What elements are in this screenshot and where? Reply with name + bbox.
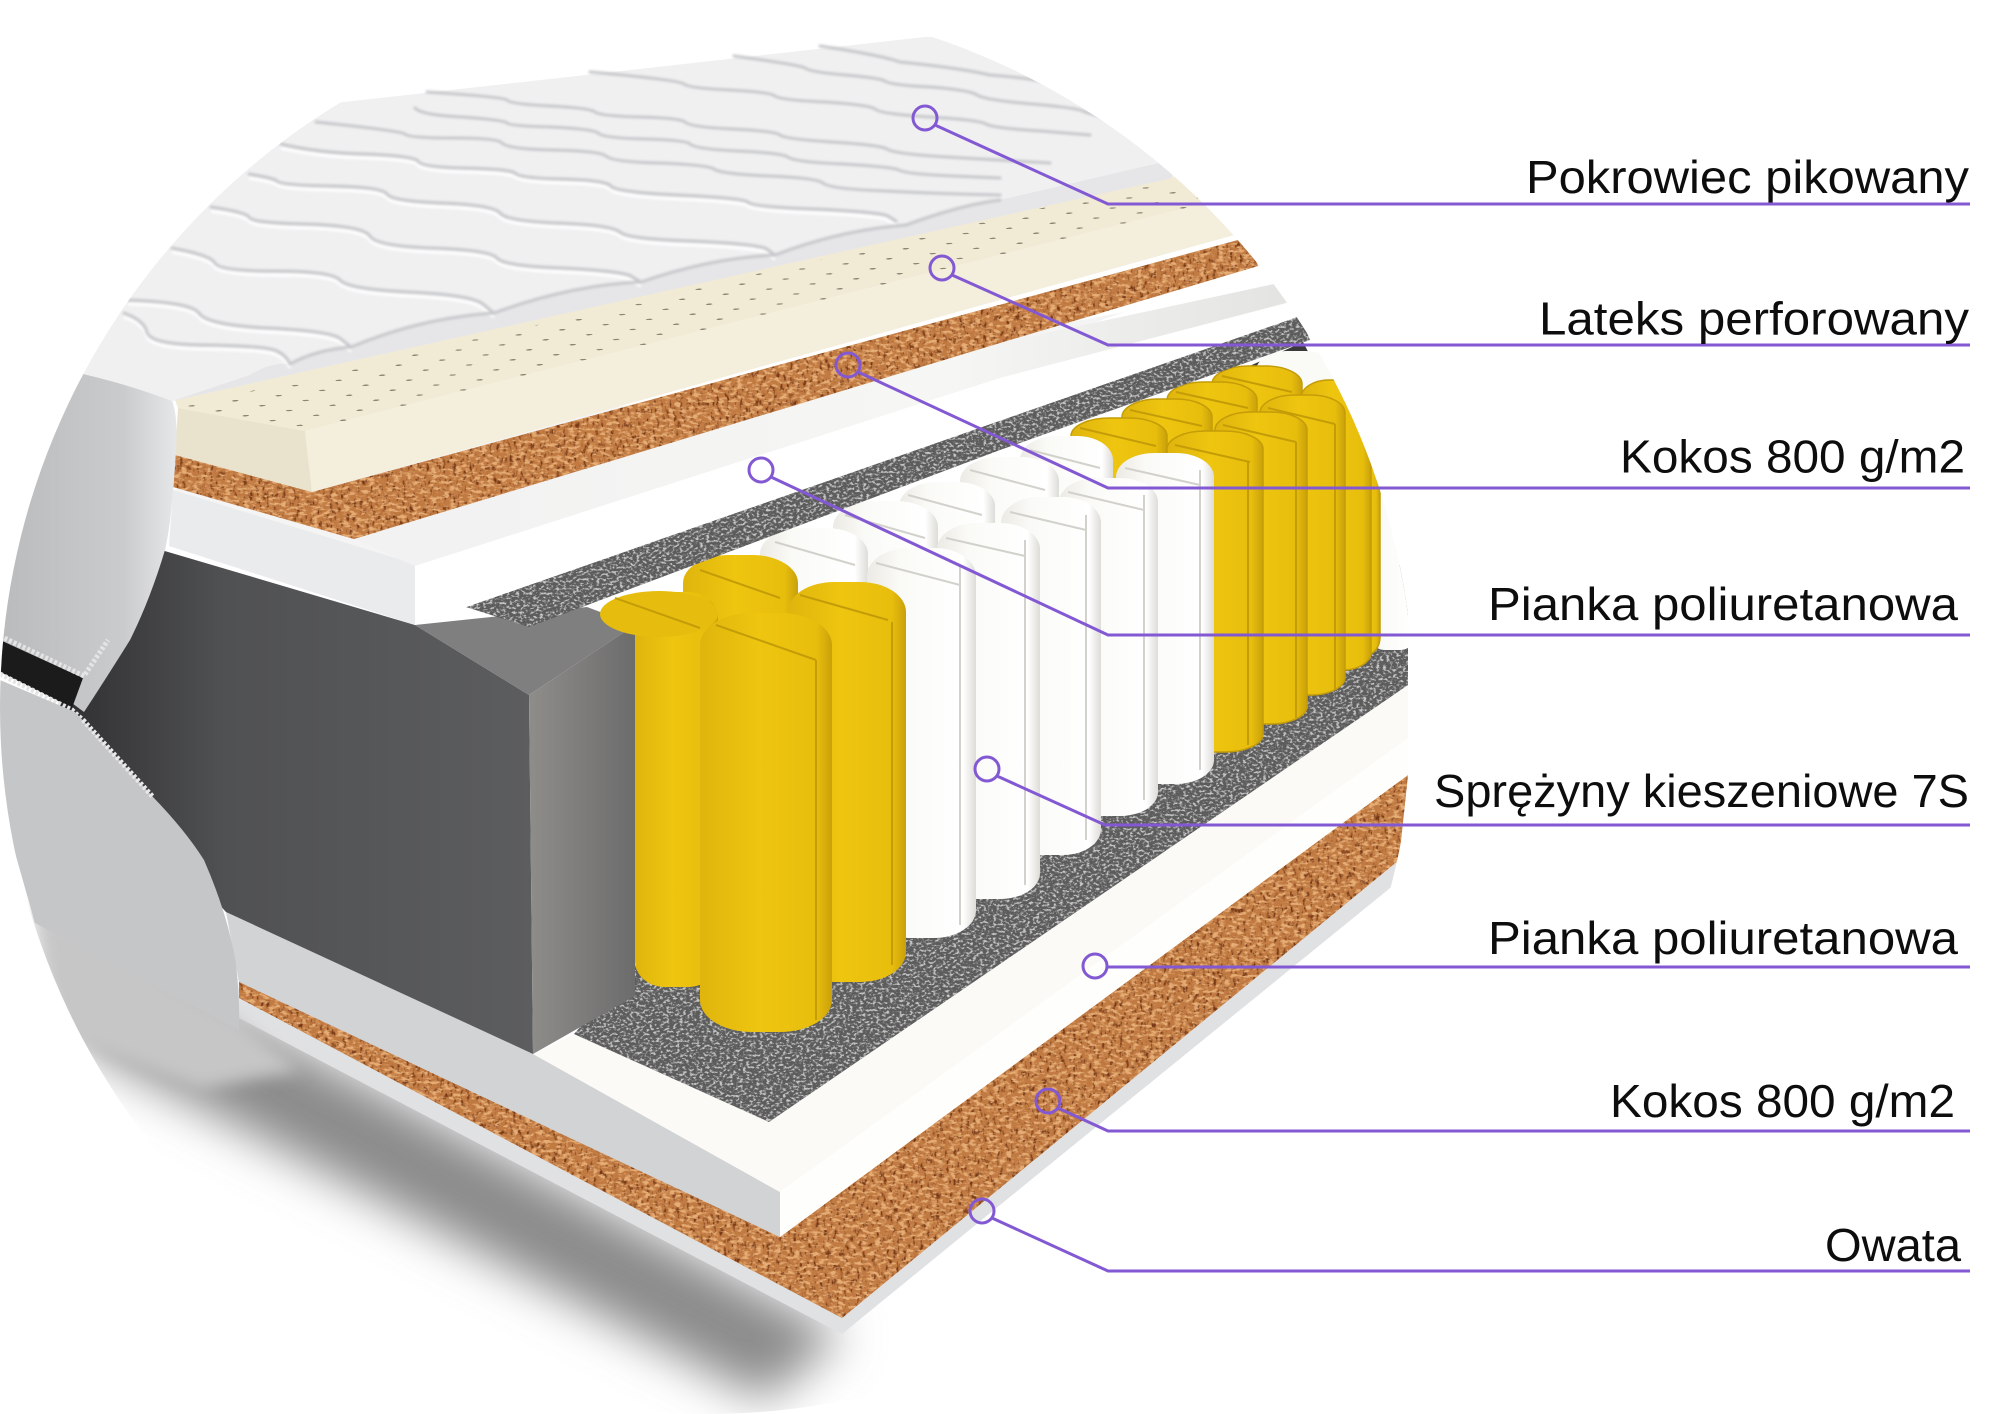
callout: Pokrowiec pikowany: Pokrowiec pikowany [1526,151,1969,203]
quilting seams [124,46,1130,364]
callout: Lateks perforowany [930,256,1970,345]
illustration: mattress cross-section [0,37,1420,1400]
lower coconut layer [239,775,1408,1318]
callout: Kokos 800 g/m2 lower: Kokos 800 g/m2 [1610,1075,1955,1127]
lower felt layer [574,560,1408,1122]
spring cavity shadow [1251,342,1308,366]
perforated latex layer [172,170,1249,492]
callout: Owata: Owata [1825,1219,1961,1271]
callout: Lateks perforowany: Lateks perforowany [1539,292,1969,344]
grey foam side block [60,520,635,1054]
callout: Pianka poliuretanowa lower [1083,912,1970,978]
callout: Pokrowiec pikowany [913,106,1970,204]
zipper band [0,640,83,708]
lower cover panel [30,905,300,1090]
callout: Kokos 800 g/m2 upper [836,353,1970,488]
upper felt layer [466,316,1310,627]
callout: Pianka poliuretanowa upper: Pianka poliuretanowa [1488,578,1958,630]
callout: Pianka poliuretanowa upper [749,458,1970,635]
floor shadow [40,930,842,1400]
callout: Owata [970,1199,1970,1271]
upper coconut layer [173,237,1258,539]
callout: Kokos 800 g/m2 lower [1036,1075,1970,1131]
cover flap with zipper [0,374,300,1090]
pocket springs: front yellow group [600,555,906,1032]
callout: Sprężyny kieszeniowe 7S [975,757,1970,825]
pocket springs: white group [760,436,1214,938]
callout: Kokos 800 g/m2 upper: Kokos 800 g/m2 [1620,430,1965,482]
lower foam layer [226,685,1408,1237]
pocket springs: far right group [1071,351,1420,752]
bottom wadding layer [239,860,1400,1334]
scalloped cover front edge [172,160,1172,401]
quilted cover [84,37,1174,401]
upper foam layer [169,250,1300,625]
callout: Sprężyny kieszeniowe 7S: Sprężyny kieszeniowe 7S [1434,765,1969,817]
callout: Pianka poliuretanowa lower: Pianka poliuretanowa [1488,912,1958,964]
